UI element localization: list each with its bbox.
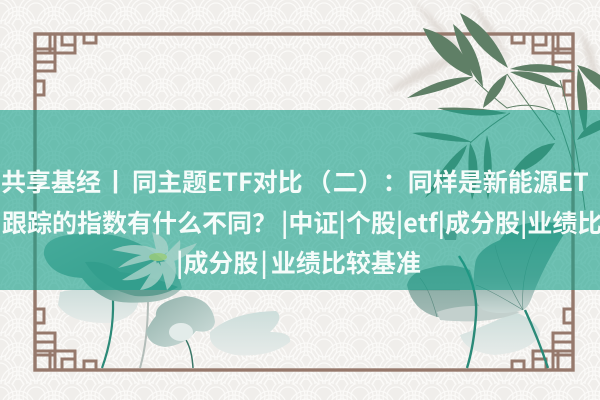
right lotus bbox=[407, 222, 570, 368]
lower lobe bbox=[437, 306, 520, 321]
ornamental frame bbox=[35, 34, 573, 370]
title line 2: 跟踪的指数有什么不同？|中证|个股|etf|成分股|业绩比 bbox=[2, 204, 600, 240]
left leaf bbox=[407, 265, 483, 318]
pale leaf shadow right bbox=[210, 311, 290, 355]
pale leaf bbox=[460, 312, 540, 355]
big leaf darker lobe bbox=[85, 262, 178, 296]
pale leaf shadow bbox=[58, 289, 138, 323]
left lotus bbox=[44, 233, 290, 368]
small leaf highlight bbox=[169, 323, 193, 341]
teal banner bbox=[0, 110, 600, 290]
stems bbox=[102, 300, 113, 368]
big leaf bbox=[44, 233, 182, 303]
bamboo bbox=[407, 13, 600, 210]
small leaf bbox=[146, 296, 215, 347]
stems bbox=[459, 256, 476, 368]
leaves bbox=[460, 13, 508, 68]
faint flower bbox=[440, 226, 458, 240]
title line 3: |成分股|业绩比较基准 bbox=[176, 244, 421, 280]
stems bbox=[470, 74, 585, 210]
big leaf bbox=[474, 222, 570, 313]
title line 1: 共享基经丨同主题ETF对比（二）：同样是新能源ET bbox=[1, 163, 589, 199]
shadow leaves bbox=[385, 0, 600, 95]
leaf veins bbox=[410, 235, 540, 317]
